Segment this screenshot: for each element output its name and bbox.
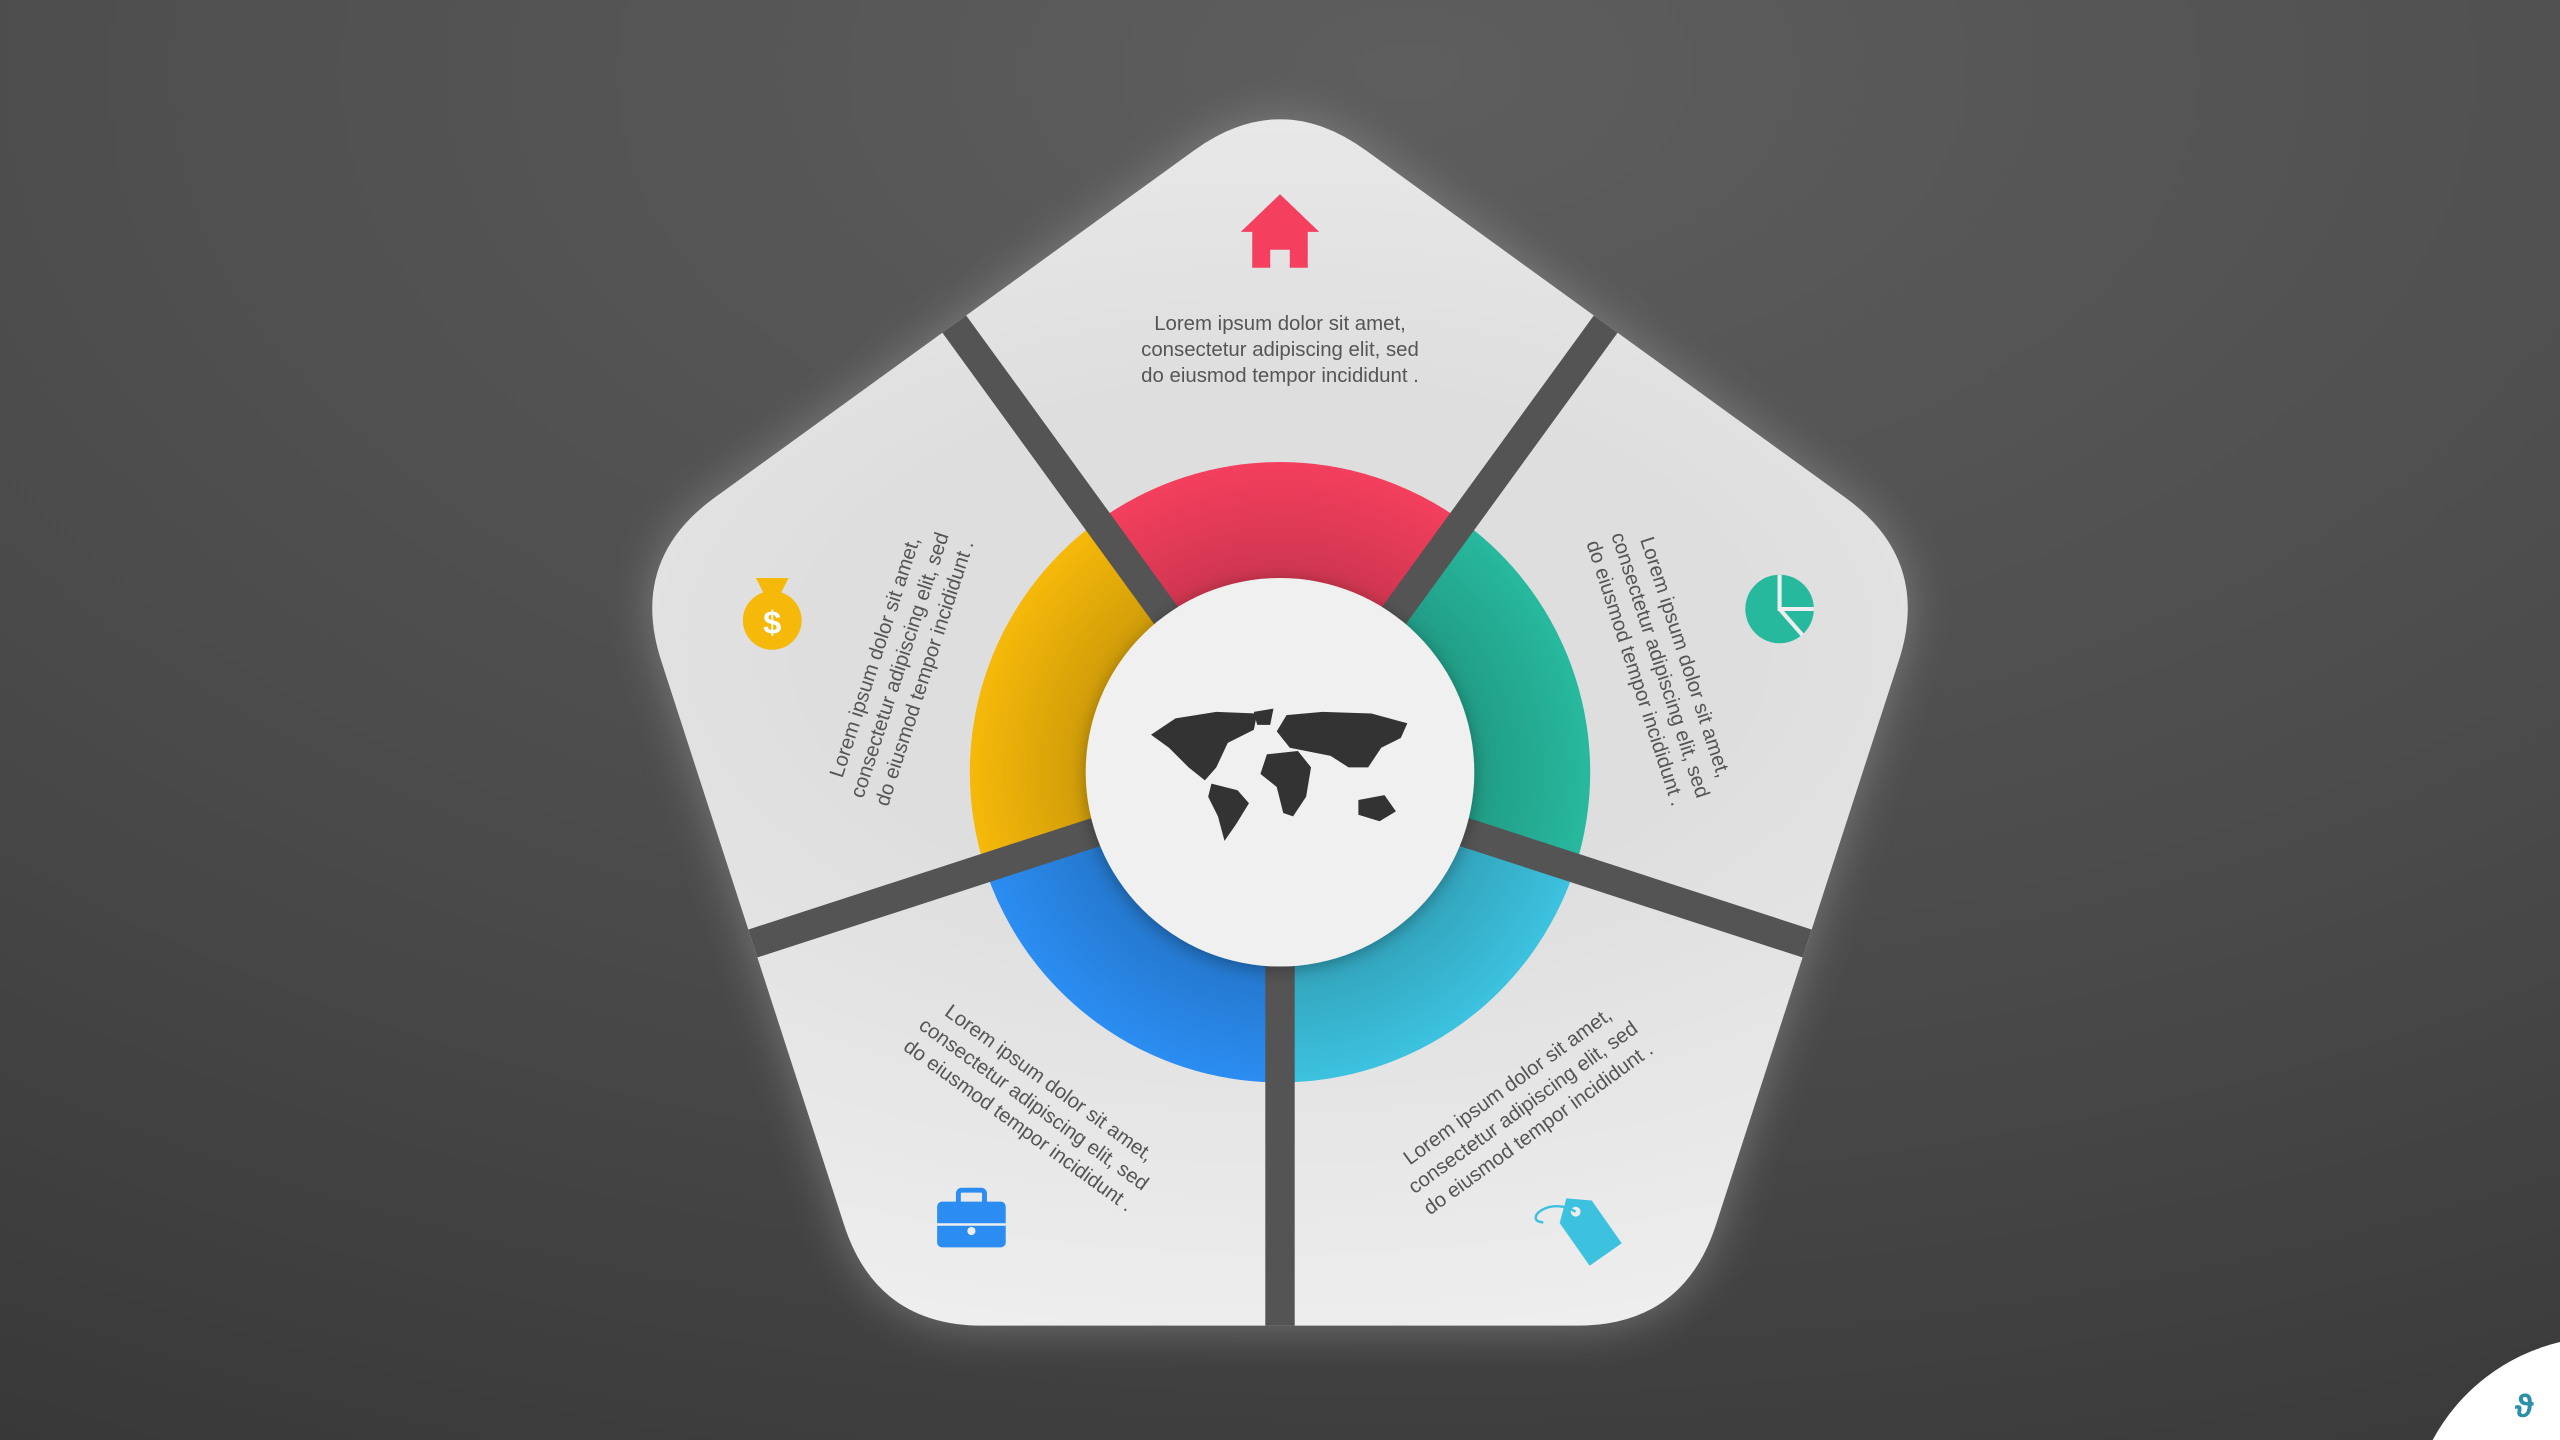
icon: world map [1151, 709, 1407, 841]
text: right [1582, 522, 1738, 809]
icon: tag [1534, 1183, 1622, 1276]
text: bottom-left: Lorem ipsum dolor sit amet, [941, 1001, 1157, 1166]
text: bottom-right: consectetur adipiscing elit, sed [1404, 1017, 1642, 1199]
text: top: do eiusmod tempor incididunt . [1141, 365, 1419, 387]
icon: house [1241, 194, 1319, 268]
text: bottom-left: consectetur adipiscing elit, sed [915, 1014, 1152, 1195]
icon: pie chart [1745, 575, 1814, 643]
ring segment: red [1110, 462, 1450, 607]
text: right: consectetur adipiscing elit, sed [1606, 530, 1713, 801]
icon: money bag [743, 578, 802, 650]
ring segment: blue [990, 846, 1266, 1082]
text: top: consectetur adipiscing elit, sed [1141, 339, 1419, 361]
center circle [1086, 578, 1474, 967]
text: left [822, 522, 978, 809]
text: right: Lorem ipsum dolor sit amet, [1635, 534, 1734, 780]
text: top [1141, 313, 1419, 387]
corner logo: ϑ [2515, 1387, 2534, 1424]
corner logo [2433, 1342, 2560, 1440]
text: bottom-right: Lorem ipsum dolor sit amet, [1400, 1004, 1616, 1170]
text: left: Lorem ipsum dolor sit amet, [826, 534, 925, 780]
ring segment: green [1406, 530, 1590, 854]
text: top: Lorem ipsum dolor sit amet, [1154, 313, 1406, 335]
text: left: consectetur adipiscing elit, sed [847, 530, 954, 801]
text: right: do eiusmod tempor incididunt . [1582, 538, 1688, 809]
ring segment: cyan [1294, 846, 1570, 1082]
ring segment: yellow [970, 530, 1154, 854]
text: bottom-right: do eiusmod tempor incididunt . [1420, 1039, 1657, 1220]
text: left: do eiusmod tempor incididunt . [872, 538, 978, 809]
glow behind pentagon [652, 119, 1908, 1326]
icon: money bag: $ [763, 603, 781, 640]
icon: briefcase [937, 1190, 1006, 1247]
pentagon diagram [652, 119, 1908, 1326]
text: bottom-left: do eiusmod tempor incididunt . [899, 1035, 1137, 1216]
